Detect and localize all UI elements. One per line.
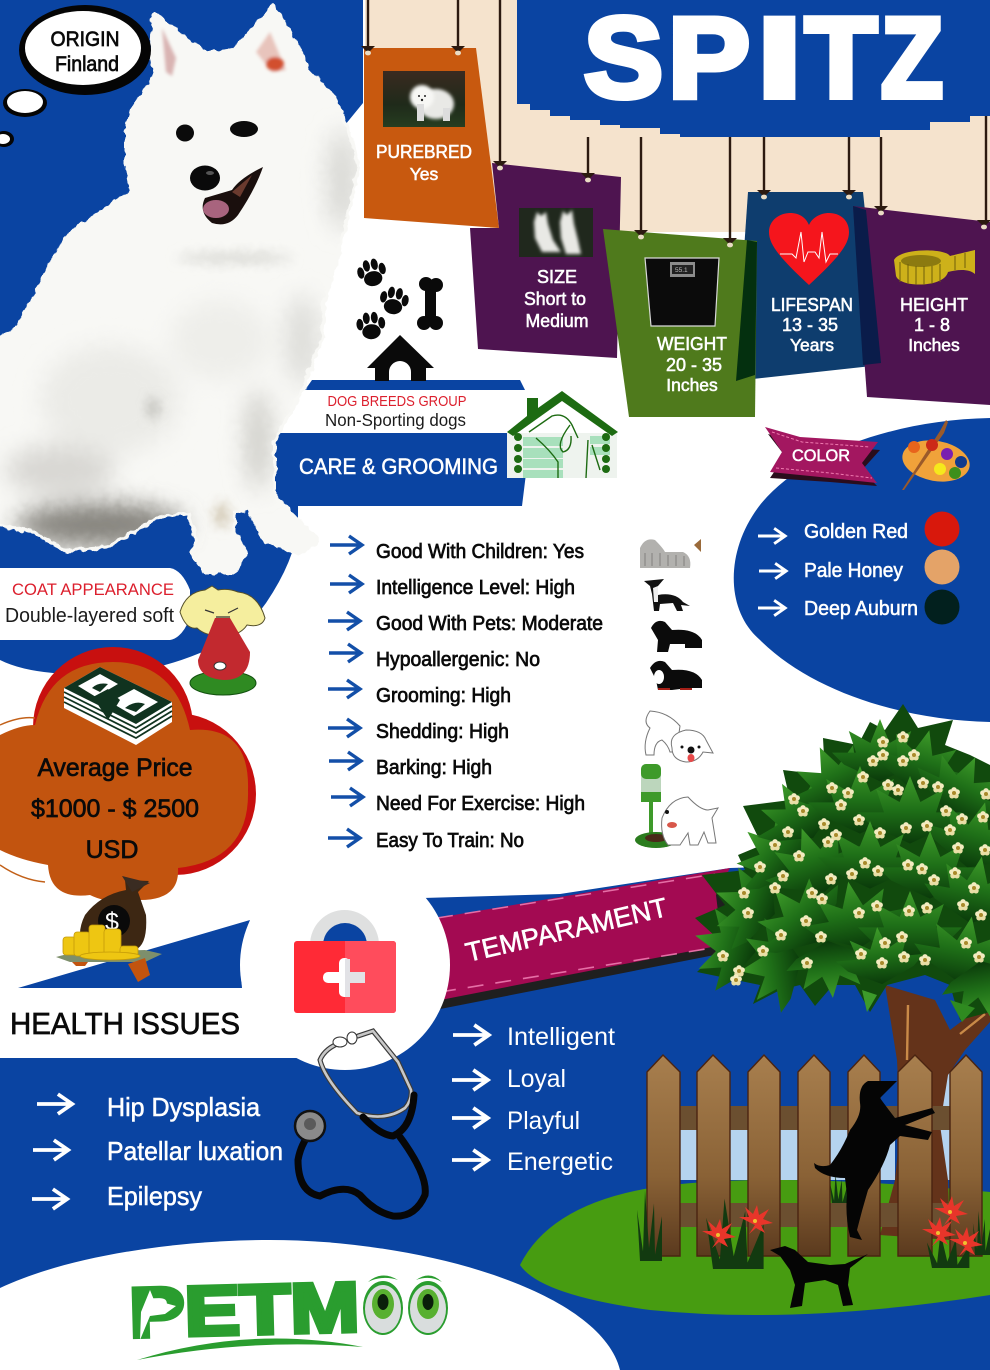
health issues list: Patellar luxation xyxy=(107,1136,283,1166)
icon: water feeder and puppy xyxy=(635,764,718,848)
care list: Good With Pets: Moderate xyxy=(376,613,603,635)
grass tufts behind fence xyxy=(830,1174,847,1205)
panel: weight card: 20 - 35 xyxy=(666,355,722,375)
care list: Barking: High xyxy=(376,757,492,779)
tree trunk xyxy=(880,985,990,1240)
panel: average price cloud xyxy=(0,647,256,902)
care list: Shedding: High xyxy=(376,721,509,743)
temperament list: Energetic xyxy=(507,1148,613,1176)
icon: first aid kit xyxy=(294,910,396,1013)
care list: Need For Exercise: High xyxy=(376,793,585,815)
panel: title banner xyxy=(517,0,990,137)
panel: top-left blue background xyxy=(0,0,531,675)
icon: outlined puppy xyxy=(645,711,713,762)
temperament heading: TEMPARAMENT xyxy=(463,892,670,968)
panel: lower blue background xyxy=(0,860,990,1370)
dog ears xyxy=(162,28,286,76)
care list xyxy=(328,536,603,852)
size value: Short to xyxy=(524,289,586,309)
panel: average price cloud: USD xyxy=(86,836,138,864)
breeds group label: DOG BREEDS GROUP xyxy=(328,394,466,410)
grass ground xyxy=(520,1180,990,1315)
weight text: WEIGHT xyxy=(657,334,727,354)
icon: paws, bone and doghouse xyxy=(355,257,443,381)
care and grooming heading: CARE & GROOMING xyxy=(299,454,498,479)
panel: lifespan card xyxy=(735,192,881,381)
color: pale honey xyxy=(804,550,960,584)
thought bubble: origin: Finland xyxy=(55,53,119,76)
panel: size card xyxy=(470,163,621,358)
panel: weight card xyxy=(603,229,757,417)
size label: SIZE xyxy=(537,267,577,287)
logo: Petmoo: PETM xyxy=(128,1268,360,1352)
panel: height card: Inches xyxy=(908,335,960,355)
color list arrows xyxy=(758,528,786,616)
icon: bathroom scale: 55.1 xyxy=(675,267,688,274)
icon: green dog house xyxy=(507,391,618,478)
color: golden red: Golden Red xyxy=(804,521,908,543)
icon: black and white dog xyxy=(644,579,690,611)
icon: stethoscope xyxy=(295,1031,425,1216)
health issues list: Epilepsy xyxy=(107,1181,202,1211)
color: deep auburn: Deep Auburn xyxy=(804,598,918,620)
care list: Good With Children: Yes xyxy=(376,541,584,563)
thought bubble: origin xyxy=(0,5,151,147)
icon: black dog xyxy=(651,621,702,652)
panel: lifespan card: 13 - 35 xyxy=(782,315,838,335)
panel: health issues band xyxy=(0,988,300,1058)
temperament ribbon xyxy=(425,868,740,1012)
icon: heart with ECG xyxy=(769,213,849,285)
icon: money bag and coins xyxy=(56,876,162,982)
color: golden red xyxy=(804,512,960,546)
lifespan text: LIFESPAN xyxy=(771,295,853,315)
white circle behind first aid xyxy=(240,860,450,1070)
purebred label: PUREBRED xyxy=(376,142,472,162)
color: pale honey: Pale Honey xyxy=(804,560,903,582)
tree blossoms xyxy=(717,731,990,986)
icon: tricolor dog xyxy=(650,661,702,690)
origin text: ORIGIN xyxy=(50,28,120,51)
health issues list: Hip Dysplasia xyxy=(107,1092,261,1122)
panel: average price cloud: $1000 - $ 2500 xyxy=(31,795,199,823)
care list: Hypoallergenic: No xyxy=(376,649,540,671)
panel: size card: Medium xyxy=(526,311,588,331)
fence sky gaps xyxy=(680,1070,950,1180)
photo: two dogs xyxy=(519,208,593,257)
height text: HEIGHT xyxy=(900,295,968,315)
logo eyes xyxy=(363,1275,448,1335)
care list: Grooming: High xyxy=(376,685,511,707)
breeds group value: Non-Sporting dogs xyxy=(325,410,466,430)
blue wedge left of health xyxy=(18,920,250,988)
panel: color blob xyxy=(734,418,990,722)
icon: money bag and coins: $ xyxy=(105,908,119,936)
dog face xyxy=(176,121,263,224)
tree canopy xyxy=(683,704,990,1025)
icon: grey shaggy dog xyxy=(640,539,701,568)
coat value: Double-layered soft xyxy=(5,605,174,627)
icon: puppy face detail xyxy=(680,746,700,762)
coat label: COAT APPEARANCE xyxy=(12,580,174,599)
panel: height card: 1 - 8 xyxy=(914,315,950,335)
panel: purebred card xyxy=(364,48,499,228)
health issues heading: HEALTH ISSUES xyxy=(10,1006,240,1041)
hooks xyxy=(361,46,990,247)
care list: Easy To Train: No xyxy=(376,830,524,852)
photo: puppy on grass xyxy=(383,71,465,127)
silhouette: standing dog xyxy=(770,1246,868,1308)
wooden fence xyxy=(647,1055,982,1256)
color ribbon xyxy=(765,427,880,486)
panel: weight card: Inches xyxy=(666,375,718,395)
color: deep auburn xyxy=(804,590,960,624)
price text: Average Price xyxy=(38,754,192,782)
icon: paint palette xyxy=(899,420,973,490)
title xyxy=(584,0,943,122)
panel: cream hanging backdrop xyxy=(365,0,990,232)
panel: coat appearance pill xyxy=(0,568,190,640)
temperament list: Playful xyxy=(507,1107,580,1135)
silhouette: jumping dog xyxy=(814,1081,935,1240)
icon: stack of cash xyxy=(64,667,172,745)
care list: Intelligence Level: High xyxy=(376,577,575,599)
logo: Petmoo xyxy=(128,1268,448,1360)
panel: height card xyxy=(853,206,990,405)
hanging strings xyxy=(368,0,986,242)
color heading: COLOR xyxy=(792,446,850,465)
icon: yellow dog eating meat xyxy=(180,586,265,695)
temperament list xyxy=(452,1023,615,1176)
icon: bathroom scale xyxy=(645,258,719,326)
photo: white spitz dog xyxy=(0,8,357,571)
icon: measuring tape xyxy=(894,250,975,285)
temperament list: Loyal xyxy=(507,1065,566,1093)
panel: lifespan card: Years xyxy=(790,335,834,355)
health issues list xyxy=(32,1092,283,1211)
white logo area xyxy=(0,1240,620,1370)
purebred value: Yes xyxy=(410,164,439,184)
temperament list: Intelligent xyxy=(507,1023,615,1051)
panel: dog breeds group xyxy=(280,380,535,433)
grass and red flowers xyxy=(637,1191,990,1269)
